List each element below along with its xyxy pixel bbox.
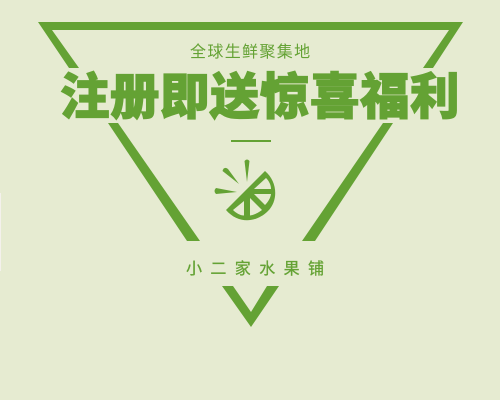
frame: top section bbox=[38, 22, 463, 68]
juice rays bbox=[214, 160, 250, 194]
lime half disc bbox=[226, 171, 275, 220]
frame: lower left stroke bbox=[108, 123, 200, 241]
frame: lower right stroke bbox=[302, 123, 393, 241]
bottom chevron bbox=[222, 286, 279, 327]
shop name: 小二家水果铺 bbox=[186, 261, 332, 278]
main heading: 注册即送惊喜福利 bbox=[60, 70, 460, 125]
divider line bbox=[231, 140, 271, 142]
left edge sliver bbox=[0, 193, 1, 271]
lime segments bbox=[233, 178, 271, 216]
subtitle: 全球生鲜聚集地 bbox=[190, 44, 311, 61]
